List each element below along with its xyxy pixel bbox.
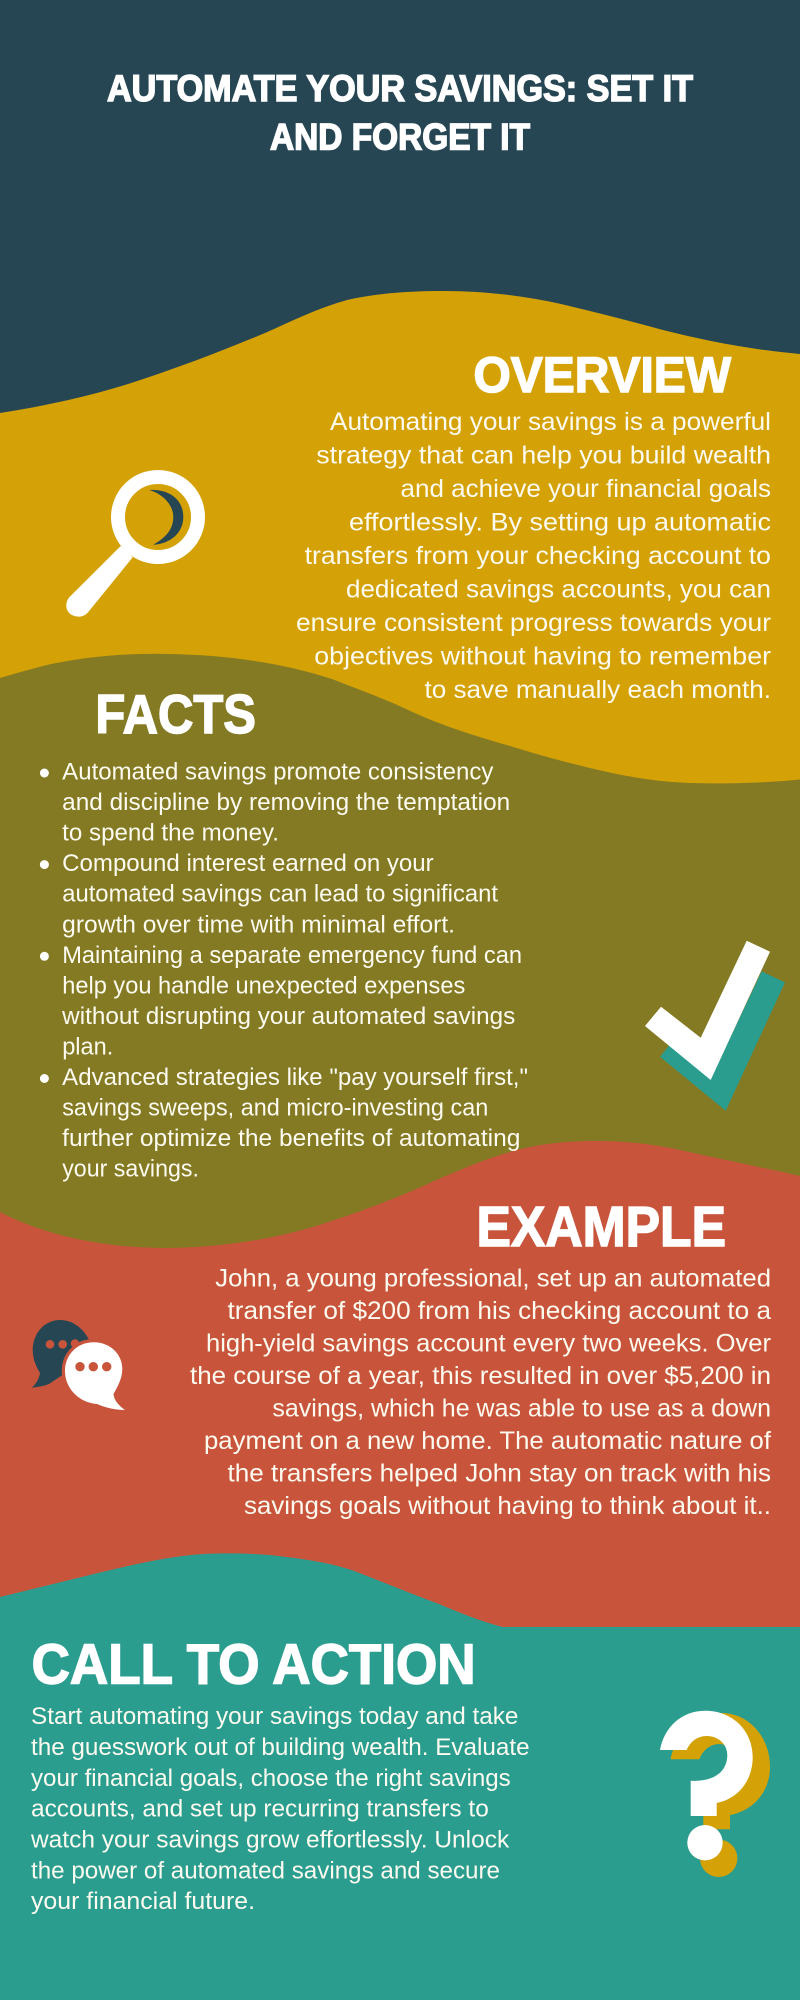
text block: call to action: the guesswork out of building wealth. Evaluate (31, 1734, 530, 1761)
panel: facts background wave (0, 654, 800, 2000)
heading: facts: FACTS (95, 684, 256, 745)
heading: example: EXAMPLE (476, 1195, 726, 1258)
text block: call to action: watch your savings grow effortlessly. Unlock (30, 1826, 510, 1854)
text block: facts list: savings sweeps, and micro-investing can (62, 1095, 488, 1122)
heading: call to action: CALL TO ACTION (32, 1632, 476, 1696)
title: AUTOMATE YOUR SAVINGS: SET IT (107, 68, 693, 109)
text block: call to action: Start automating your savings today and take (31, 1703, 518, 1730)
heading: overview: OVERVIEW (474, 347, 732, 403)
text block: overview: effortlessly. By setting up automatic (349, 508, 771, 536)
text block: overview: to save manually each month. (424, 676, 771, 704)
text block: facts list: to spend the money. (62, 820, 279, 847)
icon: magnifying glass (66, 477, 198, 617)
panel: example background wave (0, 1141, 800, 2000)
text block: overview: strategy that can help you build wealth (316, 442, 771, 470)
text block: overview: transfers from your checking account to (305, 542, 771, 570)
text block: call to action: your financial goals, choose the right savings (31, 1765, 511, 1792)
text block: overview: Automating your savings is a powerful (330, 408, 771, 436)
text block: example (190, 1264, 771, 1520)
text block: example: the course of a year, this resulted in over $5,200 in (190, 1362, 771, 1390)
text block: example: savings goals without having to think about it.. (244, 1492, 771, 1520)
text block: facts list: and discipline by removing the temptation (62, 789, 510, 816)
text block: facts list: growth over time with minimal effort. (62, 911, 455, 938)
text block: facts list: plan. (62, 1034, 113, 1060)
text block: call to action: accounts, and set up recurring transfers to (31, 1796, 489, 1823)
text block: facts list: Advanced strategies like "pay yourself first," (62, 1064, 528, 1091)
text block: overview: and achieve your financial goals (400, 475, 771, 503)
text block: facts list: Compound interest earned on your (62, 850, 434, 877)
text block: facts list: Maintaining a separate emergency fund can (62, 942, 522, 969)
panel: call to action background wave (0, 1553, 800, 2000)
text block: example: the transfers helped John stay on track with his (228, 1460, 771, 1488)
icon: check mark (645, 941, 785, 1111)
text block: facts list: your savings. (62, 1156, 199, 1183)
text block: overview: dedicated savings accounts, you can (346, 576, 771, 604)
text block: overview: ensure consistent progress towards your (296, 609, 771, 637)
text block: example: savings, which he was able to use as a down (272, 1394, 771, 1422)
text block: facts list: help you handle unexpected expenses (62, 972, 465, 999)
text block: facts list: without disrupting your automated savings (61, 1003, 515, 1030)
title (107, 68, 693, 158)
title: AND FORGET IT (270, 116, 530, 158)
text block: example: payment on a new home. The automatic nature of (204, 1427, 771, 1455)
text block: call to action: the power of automated savings and secure (31, 1857, 500, 1884)
text block: example: high-yield savings account every two weeks. Over (206, 1330, 771, 1358)
text block: call to action: your financial future. (31, 1888, 255, 1915)
text block: facts list: Automated savings promote consistency (62, 758, 493, 786)
text block: facts list (40, 758, 528, 1183)
text block: example: John, a young professional, set up an automated (215, 1264, 771, 1292)
text block: example: transfer of $200 from his checking account to a (228, 1297, 771, 1325)
text block: overview (296, 408, 771, 704)
icon: chat bubbles (32, 1320, 125, 1410)
icon: question mark (660, 1711, 770, 1877)
text block: call to action (30, 1703, 530, 1915)
text block: facts list: further optimize the benefits of automating (62, 1125, 520, 1152)
text block: overview: objectives without having to remember (314, 642, 771, 670)
text block: facts list: automated savings can lead to significant (62, 881, 498, 908)
